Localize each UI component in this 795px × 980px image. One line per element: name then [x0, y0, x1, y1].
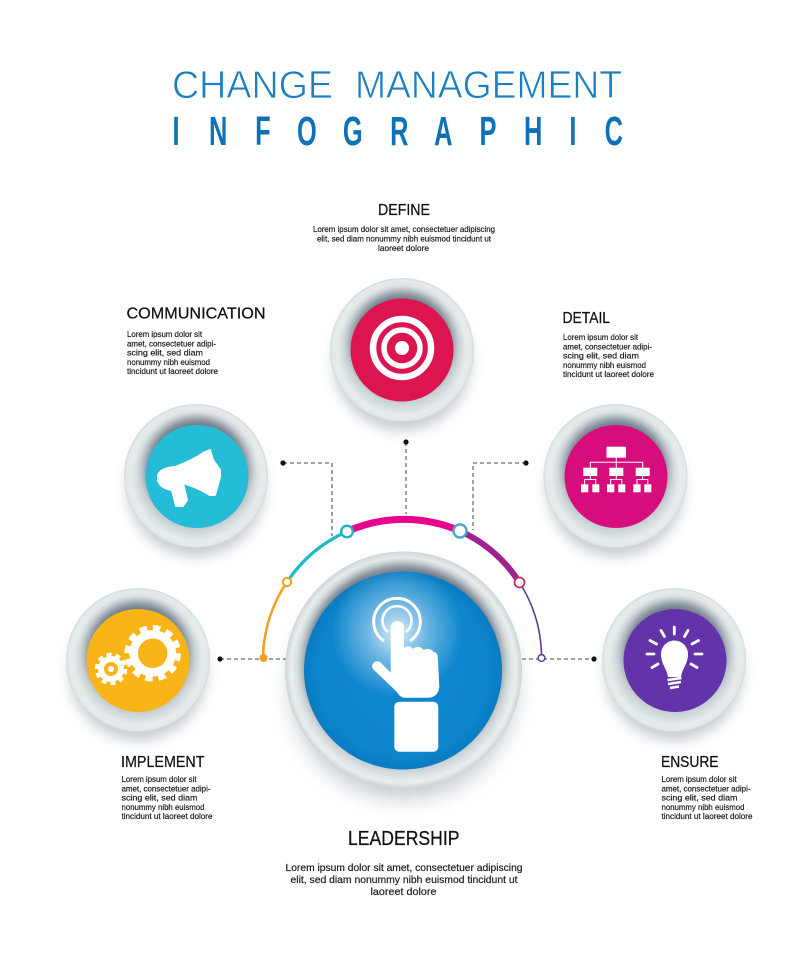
title line: change management: CHANGE: [172, 64, 333, 107]
text: implement: tincidunt ut laoreet dolore: [122, 811, 213, 821]
title line: infographic: H: [524, 109, 542, 155]
text: implement: nonummy nibh euismod: [122, 802, 205, 812]
icon: megaphone: [158, 450, 220, 506]
text: communication: [126, 306, 266, 376]
title line: infographic: N: [209, 109, 227, 155]
text: implement: scing elit, sed diam: [122, 792, 198, 802]
text: leadership: laoreet dolore: [370, 886, 437, 898]
icon: target: [373, 319, 431, 377]
text: implement: IMPLEMENT: [121, 754, 205, 771]
icon: light bulb: [647, 627, 702, 688]
title line: infographic: I: [569, 109, 576, 155]
panel: detail: [544, 404, 688, 556]
title line: change management: [172, 64, 622, 107]
text: define: elit, sed diam nonummy nibh euismod tincidunt ut: [317, 234, 492, 244]
title line: infographic: A: [434, 109, 452, 155]
text: leadership: elit, sed diam nonummy nibh euismod tincidunt ut: [290, 874, 518, 886]
text: detail: amet, consectetuer adipi-: [563, 341, 652, 351]
text: communication: amet, consectetuer adipi-: [127, 338, 216, 348]
text: implement: [121, 754, 213, 821]
title line: infographic: O: [297, 109, 317, 155]
icon: sleeve: [394, 702, 438, 752]
text: detail: Lorem ipsum dolor sit: [563, 332, 639, 342]
title line: infographic: I: [173, 109, 180, 155]
text: ensure: tincidunt ut laoreet dolore: [662, 811, 753, 821]
text: communication: Lorem ipsum dolor sit: [127, 329, 203, 339]
arc nodes: [260, 524, 545, 662]
text: ensure: Lorem ipsum dolor sit: [662, 774, 737, 784]
connector arc: [263, 519, 542, 658]
text: communication: scing elit, sed diam: [127, 348, 203, 358]
text: communication: nonummy nibh euismod: [127, 357, 210, 367]
title line: change management: MANAGEMENT: [355, 64, 622, 107]
text: ensure: scing elit, sed diam: [662, 792, 738, 802]
text: ensure: [661, 754, 753, 821]
panel: implement: [66, 588, 210, 740]
title line: infographic: P: [479, 109, 496, 155]
icon: organisation chart: [581, 447, 651, 492]
text: leadership: LEADERSHIP: [348, 827, 460, 850]
text: communication: tincidunt ut laoreet dolore: [127, 366, 218, 376]
title: [172, 64, 623, 155]
icon: pointing hand: [372, 621, 439, 698]
panel: define: [330, 278, 474, 430]
text: define: DEFINE: [378, 202, 430, 219]
title line: infographic: G: [343, 109, 363, 155]
title line: infographic: R: [390, 109, 408, 155]
icon: touch rings: [374, 598, 420, 641]
text: implement: Lorem ipsum dolor sit: [122, 774, 197, 784]
panel: communication: [124, 404, 268, 556]
text: define: laoreet dolore: [378, 243, 429, 253]
text: detail: scing elit, sed diam: [563, 350, 639, 360]
text: detail: tincidunt ut laoreet dolore: [563, 369, 654, 379]
panel: leadership: [285, 552, 522, 798]
text: ensure: ENSURE: [661, 754, 718, 771]
icon: gears: [96, 628, 178, 684]
text: communication: COMMUNICATION: [126, 306, 266, 322]
dashed leader lines: [217, 439, 597, 662]
text: ensure: nonummy nibh euismod: [662, 802, 745, 812]
text: detail: nonummy nibh euismod: [563, 360, 646, 370]
text: define: Lorem ipsum dolor sit amet, consectetuer adipiscing: [313, 224, 495, 234]
text: define: [313, 202, 495, 253]
text: leadership: [286, 827, 523, 898]
text: detail: [562, 310, 654, 379]
text: implement: amet, consectetuer adipi-: [122, 783, 211, 793]
panel: ensure: [602, 588, 746, 740]
title line: infographic: F: [255, 109, 271, 155]
text: ensure: amet, consectetuer adipi-: [662, 783, 751, 793]
title line: infographic: [173, 109, 623, 155]
title line: infographic: C: [605, 109, 623, 155]
text: detail: DETAIL: [562, 310, 610, 327]
text: leadership: Lorem ipsum dolor sit amet, consectetuer adipiscing: [286, 862, 523, 874]
